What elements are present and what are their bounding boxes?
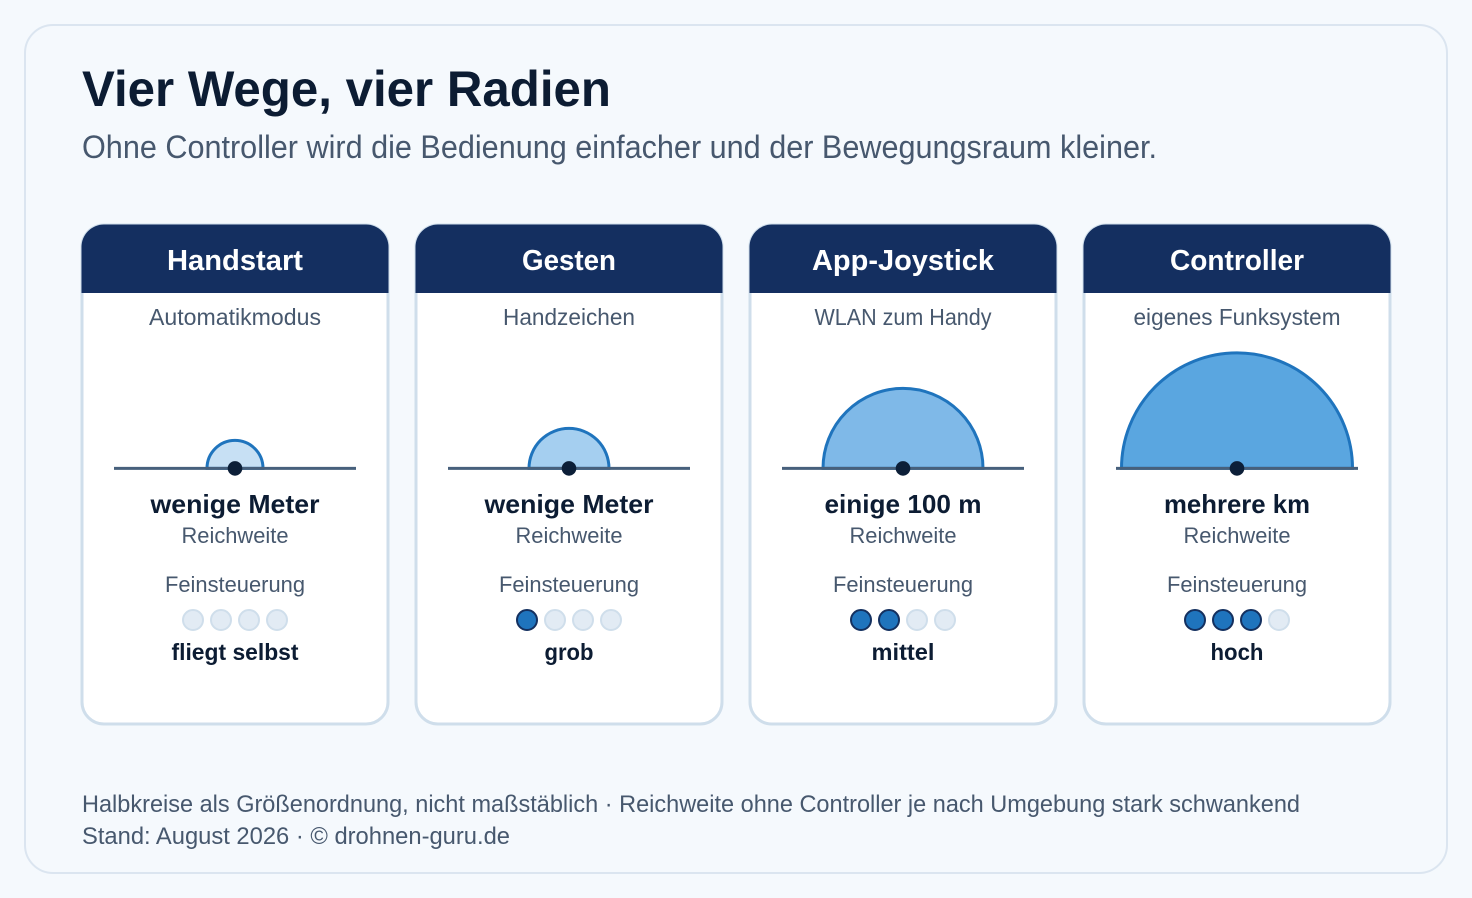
panel: Handstart — [82, 224, 388, 724]
card body — [750, 225, 1056, 724]
mode description: WLAN zum Handy — [814, 304, 992, 330]
rating text: mittel — [872, 639, 934, 665]
card heading: Handstart — [167, 245, 303, 277]
card body — [416, 225, 722, 724]
range value: wenige Meter — [149, 489, 320, 519]
footnote — [82, 791, 1300, 850]
range label: Reichweite — [1184, 523, 1290, 548]
mode description: Handzeichen — [503, 304, 635, 330]
card heading: Gesten — [522, 245, 616, 277]
rating text: fliegt selbst — [172, 639, 299, 665]
range value: wenige Meter — [483, 489, 654, 519]
range value: mehrere km — [1164, 489, 1310, 519]
rating dots — [517, 610, 621, 630]
card heading: Controller — [1170, 245, 1304, 277]
range label: Reichweite — [182, 523, 288, 548]
mode description: eigenes Funksystem — [1134, 304, 1340, 330]
rating text: grob — [544, 639, 594, 665]
rating dots — [183, 610, 287, 630]
range semicircle — [782, 388, 1024, 476]
rating text: hoch — [1210, 639, 1264, 665]
fine control label: Feinsteuerung — [833, 572, 973, 597]
fine control label: Feinsteuerung — [165, 572, 305, 597]
fine control label: Feinsteuerung — [1167, 572, 1307, 597]
subtitle: Ohne Controller wird die Bedienung einfacher und der Bewegungsraum kleiner. — [82, 129, 1157, 165]
panel: Controller — [1084, 224, 1390, 724]
range value: einige 100 m — [824, 489, 982, 519]
title: Vier Wege, vier Radien — [82, 61, 611, 117]
range semicircle — [448, 428, 690, 476]
card header — [1084, 224, 1390, 293]
card header — [416, 224, 722, 293]
card heading: App-Joystick — [812, 245, 995, 277]
panel: Gesten — [416, 224, 722, 724]
card body — [82, 225, 388, 724]
panel: App-Joystick — [750, 224, 1056, 724]
footnote: Halbkreise als Größenordnung, nicht maßstäblich · Reichweite ohne Controller je nach Umgebung stark schwankend — [82, 791, 1300, 818]
card header — [750, 224, 1056, 293]
rating dots — [851, 610, 955, 630]
range semicircle — [114, 440, 356, 476]
range semicircle — [1116, 353, 1358, 476]
rating dots — [1185, 610, 1289, 630]
range label: Reichweite — [516, 523, 622, 548]
range label: Reichweite — [850, 523, 956, 548]
mode description: Automatikmodus — [149, 304, 321, 330]
card body — [1084, 225, 1390, 724]
fine control label: Feinsteuerung — [499, 572, 639, 597]
card header — [82, 224, 388, 293]
footnote: Stand: August 2026 · © drohnen-guru.de — [82, 823, 510, 850]
